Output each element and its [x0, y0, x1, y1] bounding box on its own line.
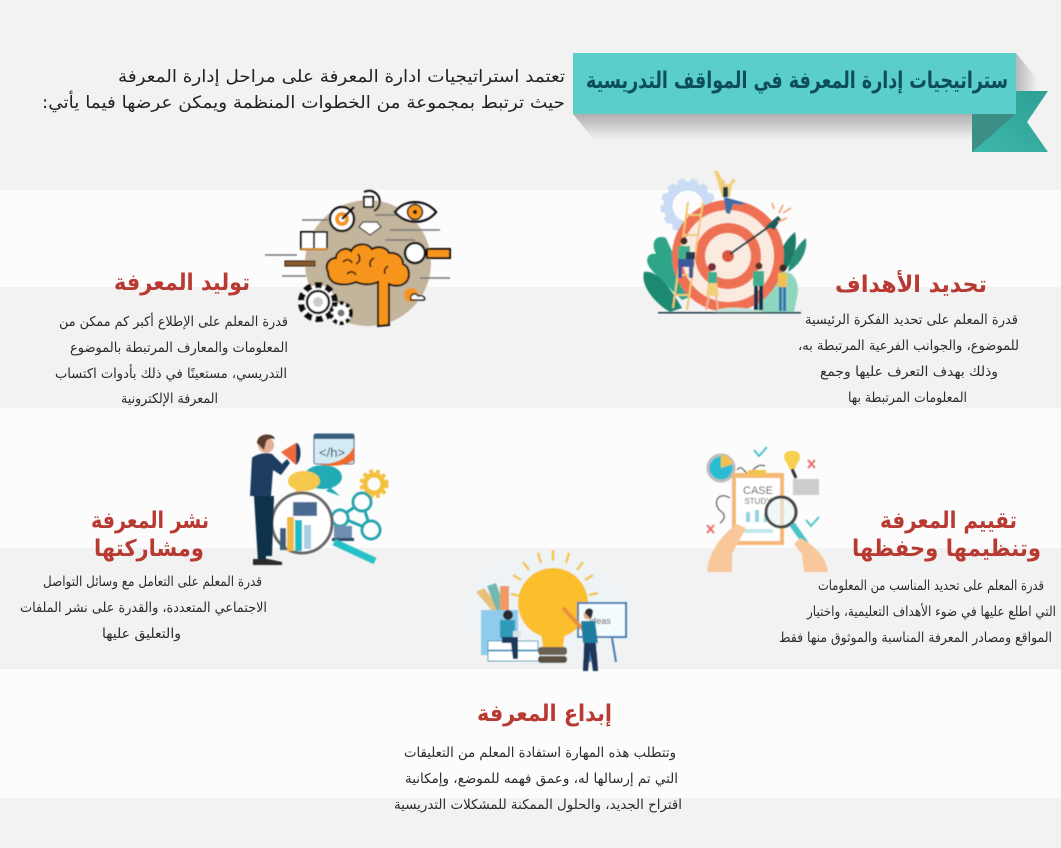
text: knowledge sharing	[20, 574, 267, 642]
heading: knowledge sharing	[91, 508, 209, 562]
illustration: presenter with megaphone: </h>	[319, 445, 345, 460]
illustration: case study	[707, 447, 828, 572]
text: knowledge generation: التدريسي، مستعينًا في ذلك بأدوات اكتساب	[55, 364, 287, 382]
text: knowledge generation: المعلومات والمعارف المرتبطة بالموضوع	[70, 340, 288, 356]
illustration: light bulb idea: ideas	[589, 616, 611, 626]
text: knowledge sharing: الاجتماعي المتعددة، والقدرة على نشر الملفات	[20, 600, 267, 616]
illustration: presenter with megaphone	[250, 434, 387, 565]
text: knowledge generation: المعرفة الإلكترونية	[121, 391, 218, 407]
intro paragraph: حيث ترتبط بمجموعة من الخطوات المنظمة ويمكن عرضها فيما يأتي:	[42, 90, 565, 113]
text: knowledge creativity: وتتطلب هذه المهارة استفادة المعلم من التعليقات	[404, 745, 676, 761]
text: goal setting	[798, 312, 1019, 406]
text: knowledge creativity: اقتراح الجديد، والحلول الممكنة للمشكلات التدريسية	[394, 797, 682, 813]
text: knowledge sharing: قدرة المعلم على التعامل مع وسائل التواصل	[43, 574, 262, 590]
text: knowledge sharing: والتعليق عليها	[102, 626, 181, 642]
text: goal setting: للموضوع، والجوانب الفرعية المرتبطة به،	[798, 338, 1019, 354]
text: knowledge generation	[55, 312, 288, 407]
text: goal setting: وذلك بهدف التعرف عليها وجمع	[820, 364, 998, 380]
text: knowledge generation: قدرة المعلم على الإطلاع أكبر كم ممكن من	[59, 312, 288, 330]
heading: knowledge sharing: نشر المعرفة	[91, 508, 209, 534]
illustration: case study: STUDY	[744, 497, 772, 506]
heading: knowledge creativity: إبداع المعرفة	[477, 701, 612, 727]
title ribbon banner	[573, 53, 1048, 152]
illustration: case study: CASE	[743, 485, 773, 497]
intro paragraph	[42, 67, 565, 113]
heading: evaluation	[852, 508, 1041, 562]
heading: knowledge generation: توليد المعرفة	[114, 270, 250, 296]
text: goal setting: المعلومات المرتبطة بها	[848, 390, 967, 406]
text: knowledge creativity	[394, 745, 682, 813]
intro paragraph: تعتمد استراتيجيات ادارة المعرفة على مراحل إدارة المعرفة	[118, 67, 565, 87]
heading: goal setting: تحديد الأهداف	[835, 269, 987, 298]
illustration: target with people	[643, 171, 806, 314]
text: evaluation	[779, 578, 1056, 646]
text: goal setting: قدرة المعلم على تحديد الفكرة الرئيسية	[805, 312, 1018, 328]
text: knowledge creativity: التي تم إرسالها له، وعمق فهمه للموضع، وإمكانية	[405, 771, 678, 787]
illustration: brain	[265, 191, 450, 326]
illustration: light bulb idea	[465, 550, 626, 671]
heading: evaluation: تقييم المعرفة	[880, 508, 1017, 534]
heading: knowledge sharing: ومشاركتها	[94, 536, 204, 562]
heading: evaluation: وتنظيمها وحفظها	[852, 536, 1041, 562]
